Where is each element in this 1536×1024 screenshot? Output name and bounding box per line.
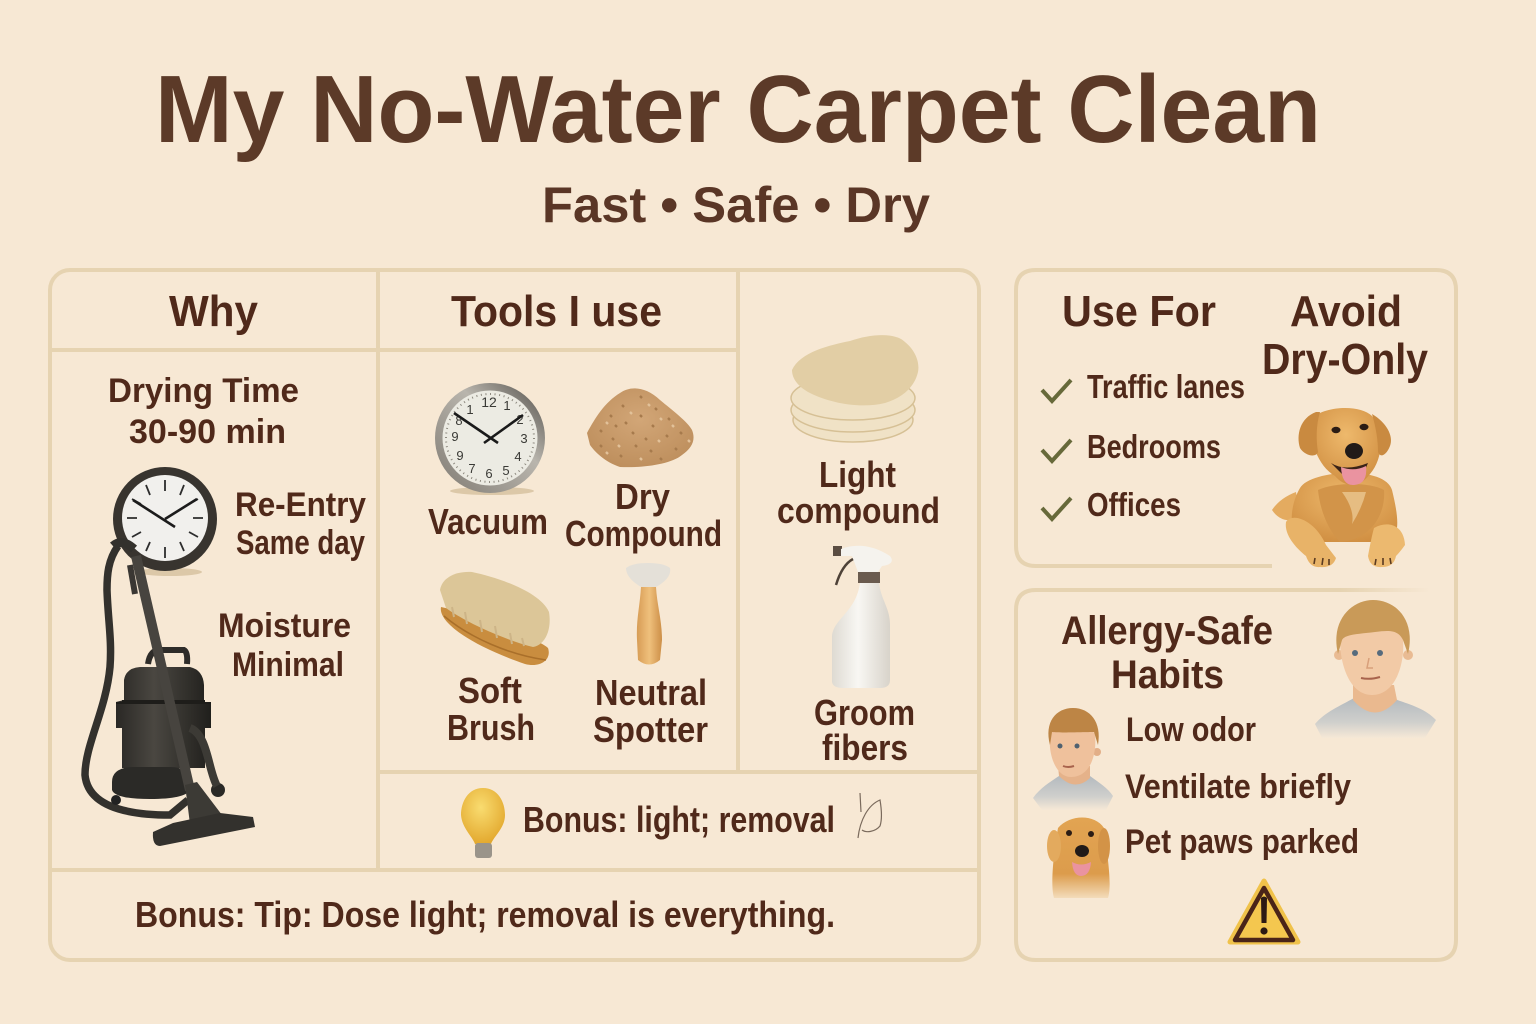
icon: dog head	[1047, 818, 1110, 898]
label: dry compound	[565, 476, 722, 554]
panel: allergy-safe habits	[1016, 588, 1456, 960]
heading: allergy-safe habits: Habits	[1111, 653, 1224, 697]
heading: why: Why	[169, 287, 258, 336]
label: light compound: Light	[819, 454, 896, 495]
text: bonus: Bonus: light; removal	[523, 799, 835, 840]
panel: main table	[50, 270, 979, 960]
icon: silver clock: 8	[455, 413, 463, 428]
subtitle: Fast • Safe • Dry	[542, 177, 930, 233]
icon: vacuum cleaner	[85, 543, 255, 846]
label: neutral spotter: Spotter	[593, 709, 708, 750]
text: drying time: 30-90 min	[129, 413, 286, 451]
label: soft brush: Brush	[447, 707, 535, 748]
label: dry compound: Dry	[615, 476, 670, 517]
icon: boy small	[1033, 708, 1113, 810]
icon: silver clock: 3	[520, 431, 528, 446]
icon: silver clock: 9	[451, 429, 459, 444]
text: drying time: Drying Time	[108, 372, 299, 410]
text: re-entry	[235, 486, 366, 562]
icon: wall clock on vacuum	[113, 467, 217, 576]
checklist: Offices	[1087, 486, 1181, 523]
label: light compound	[777, 454, 940, 531]
icon: silver clock: 1	[466, 402, 474, 417]
label: light compound: compound	[777, 490, 940, 531]
heading: avoid dry-only: Dry-Only	[1262, 335, 1428, 384]
label: neutral spotter: Neutral	[595, 672, 707, 713]
heading: allergy-safe habits: Allergy-Safe	[1061, 609, 1273, 653]
text: drying time	[108, 372, 299, 451]
list: habits: Low odor	[1126, 711, 1256, 749]
text: moisture	[218, 607, 351, 684]
icon: scribble	[858, 793, 882, 838]
icon: silver clock: 9	[456, 448, 464, 463]
text: moisture: Minimal	[232, 646, 344, 684]
icon: spray bottle	[832, 546, 892, 688]
icon: silver clock: 1	[503, 398, 511, 413]
text: re-entry: Same day	[236, 524, 365, 562]
checklist	[1042, 368, 1245, 523]
icon: light bulb	[461, 788, 505, 858]
label: groom fibers: fibers	[822, 727, 908, 768]
icon: neutral spotter	[626, 563, 670, 664]
label: vacuum: Vacuum	[428, 501, 548, 542]
heading: avoid dry-only	[1262, 287, 1428, 384]
icon: silver clock: 4	[514, 449, 522, 464]
heading: avoid dry-only: Avoid	[1290, 287, 1402, 336]
icon: felt pads	[791, 335, 918, 442]
checklist: Traffic lanes	[1087, 368, 1245, 405]
icon: golden retriever lying	[1272, 408, 1405, 567]
heading: use for: Use For	[1062, 287, 1216, 336]
icon: compound pile	[587, 388, 694, 467]
label: dry compound: Compound	[565, 513, 722, 554]
icon: soft brush	[440, 572, 550, 665]
list: habits: Pet paws parked	[1125, 823, 1359, 861]
icon: warning triangle	[1230, 881, 1298, 942]
icon: silver clock: 5	[502, 463, 510, 478]
icon: silver clock: 2	[516, 412, 524, 427]
panel: use for / avoid	[1016, 270, 1456, 600]
title: My No-Water Carpet Clean	[155, 56, 1321, 163]
label: groom fibers	[814, 692, 915, 768]
icon: silver clock: 6	[485, 466, 493, 481]
text: moisture: Moisture	[218, 607, 351, 645]
label: soft brush	[447, 670, 535, 748]
icon: silver clock: 7	[468, 461, 476, 476]
heading: allergy-safe habits	[1061, 609, 1273, 697]
text: re-entry: Re-Entry	[235, 486, 366, 524]
checklist: Bedrooms	[1087, 428, 1221, 465]
label: soft brush: Soft	[458, 670, 522, 711]
label: neutral spotter	[593, 672, 708, 750]
heading: tools: Tools I use	[451, 287, 662, 336]
icon: silver clock	[435, 383, 545, 495]
list: habits: Ventilate briefly	[1125, 768, 1351, 806]
list: habits	[1125, 711, 1359, 861]
label: groom fibers: Groom	[814, 692, 915, 733]
icon: boy large	[1315, 600, 1436, 738]
icon: silver clock: 12	[481, 394, 497, 410]
text: bottom tip: Bonus: Tip: Dose light; removal is everything.	[135, 894, 835, 935]
